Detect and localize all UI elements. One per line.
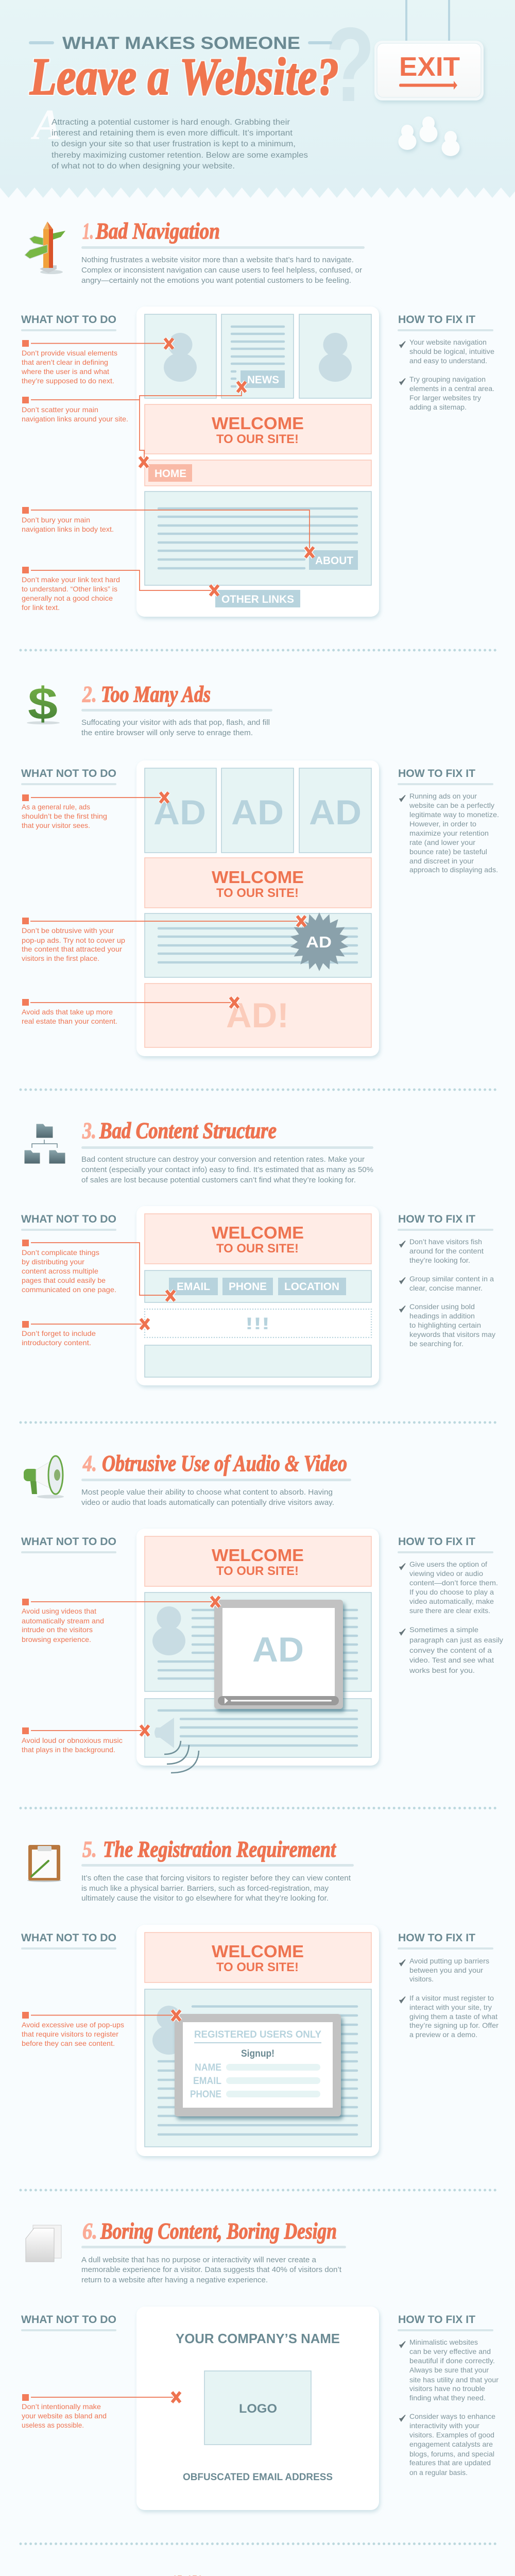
icon: signpost (25, 222, 65, 274)
fix list: Don’t have visitors fish (409, 1238, 482, 1246)
fix list (400, 338, 494, 411)
people icons (399, 116, 459, 156)
callout 1: Don’t provide visual elements (22, 349, 117, 357)
intro text (52, 118, 308, 171)
heading: how to fix it: HOW TO FIX IT (398, 2314, 475, 2326)
registration popup: EMAIL (193, 2076, 221, 2087)
callout 2: that plays in the background. (22, 1745, 115, 1754)
intro text: of what not to do when designing your website. (52, 162, 235, 171)
section 6: boring content (21, 2218, 499, 2510)
description (81, 718, 270, 737)
fix list (400, 1560, 503, 1674)
fix list: website can be a perfectly (409, 801, 494, 809)
video player (214, 1600, 343, 1709)
fix list: Consider using bold (409, 1302, 475, 1311)
panel: mock website: AD! (226, 996, 289, 1035)
section 1: bad navigation (21, 218, 494, 617)
callout 1: As a general rule, ads (22, 803, 90, 811)
fix list: video automatically, make (409, 1597, 494, 1605)
description: Nothing frustrates a website visitor more than a website that’s hard to navigate. (81, 256, 354, 264)
description (81, 256, 362, 285)
fix list: elements in a central area. (409, 384, 494, 393)
fix list: be searching for. (409, 1340, 464, 1348)
callout 1: where the user is and what (21, 367, 109, 376)
callout 1: intrude on the visitors (22, 1625, 93, 1634)
section 7: poor legibility (20, 2572, 497, 2576)
fix list: can be very effective and (409, 2347, 491, 2355)
callout 2: pop-up ads. Try not to cover up (22, 936, 125, 944)
callout 3 (22, 507, 314, 557)
heading: how to fix it (398, 1932, 493, 1950)
callout 1: that your visitor sees. (22, 821, 90, 829)
fix list: Minimalistic websites (409, 2338, 478, 2346)
panel: mock website: AD (153, 793, 206, 832)
callout 4: to understand. “Other links” is (22, 585, 117, 593)
fix list: maximize your retention (409, 829, 489, 837)
fix list: visitors have no trouble (409, 2384, 485, 2393)
callout 1: pages that could easily be (22, 1276, 106, 1284)
icon: clipboard (27, 1845, 61, 1882)
icon: folders (24, 1124, 65, 1164)
description (81, 1488, 334, 1507)
panel: mock website (136, 760, 379, 1056)
callout 2: Don’t scatter your main (22, 405, 98, 414)
title: Leave a Website? (29, 47, 339, 106)
fix list: headings in addition (409, 1312, 475, 1320)
callout 1: Avoid using videos that (22, 1607, 96, 1615)
heading: how to fix it (398, 1536, 493, 1553)
panel: mock website: !!! (245, 1314, 270, 1333)
heading: Boring Content, Boring Design (100, 2218, 337, 2244)
heading: Bad Content Structure (99, 1118, 277, 1143)
description: memorable experience for a visitor. Data suggests that 40% of visitors don’t (81, 2265, 342, 2274)
section 5: registration requirement (21, 1837, 499, 2156)
panel: mock website: AD (309, 793, 362, 832)
fix list: If you do choose to play a (409, 1588, 494, 1596)
header (0, 0, 515, 198)
heading: how to fix it (398, 314, 493, 331)
callout 1: by distributing your (22, 1258, 84, 1266)
callout 2: visitors in the first place. (22, 954, 99, 962)
ad burst: AD (306, 933, 332, 951)
panel: mock website: TO OUR SITE! (216, 432, 299, 446)
registration popup: Signup! (241, 2048, 274, 2059)
fix list: beautiful if done correctly. (409, 2357, 495, 2365)
fix list: paragraph can just as easily (409, 1636, 503, 1644)
panel: mock website: TO OUR SITE! (216, 1960, 299, 1974)
description (81, 1874, 351, 1903)
fix list: and easy to understand. (409, 357, 487, 365)
fix list: blogs, forums, and special (409, 2450, 494, 2458)
description: ultimately cause the visitor to go elsewhere for what they’re looking for. (81, 1894, 329, 1903)
heading: what not to do: WHAT NOT TO DO (21, 1536, 116, 1548)
description: content (especially your contact info) easy to find. It’s estimated that as many as 50% (81, 1165, 373, 1174)
callout 1: that require visitors to register (22, 2030, 118, 2038)
callout 2: Don’t be obtrusive with your (22, 926, 114, 935)
panel: mock website: WELCOME (212, 1942, 304, 1961)
callout 4: Don’t make your link text hard (22, 575, 120, 584)
description (81, 1155, 373, 1184)
callout 2 (22, 382, 246, 467)
heading: what not to do (21, 314, 116, 331)
callout 3: real estate than your content. (22, 1017, 117, 1025)
heading: what not to do (21, 1932, 116, 1950)
panel: mock website: LOCATION (284, 1281, 339, 1293)
callout 1 (22, 792, 168, 829)
panel: mock website (136, 1529, 379, 1773)
fix list: giving them a taste of what (409, 2012, 497, 2021)
callout 3: Don’t bury your main (22, 516, 90, 524)
panel: mock website: TO OUR SITE! (216, 886, 299, 900)
callout 1: Don’t intentionally make (22, 2402, 101, 2411)
fix list: and discreet in your (409, 857, 474, 865)
heading: what not to do: WHAT NOT TO DO (21, 1932, 116, 1944)
fix list: visitors. Examples of good (409, 2431, 494, 2439)
fix list: video. Test and see what (409, 1656, 494, 1664)
callout 2: the content that attracted your (22, 945, 122, 953)
description: the entire browser will only serve to enrage them. (81, 728, 253, 737)
panel: mock website: WELCOME (212, 1223, 304, 1242)
panel: mock website: WELCOME (212, 868, 304, 887)
callout 2 (22, 916, 305, 962)
fix list: However, in order to (409, 820, 476, 828)
callout 2: navigation links around your site. (22, 415, 128, 423)
fix list (400, 2338, 499, 2477)
description: is much like a physical barrier. Barriers, such as forced-registration, may (81, 1884, 329, 1893)
callout 2 (22, 1319, 149, 1347)
fix list: interactivity with your (409, 2421, 479, 2430)
description: of sales are lost because potential customers can’t find what they’re looking for. (81, 1176, 356, 1184)
panel: mock website: YOUR COMPANY’S NAME (176, 2331, 340, 2346)
heading: how to fix it: HOW TO FIX IT (398, 768, 475, 779)
heading: Too Many Ads (101, 682, 211, 707)
registration popup: NAME (195, 2062, 221, 2073)
heading: how to fix it: HOW TO FIX IT (398, 314, 475, 326)
icon: blank pages (26, 2225, 61, 2262)
callout 1: your website as bland and (22, 2412, 107, 2420)
callout 2: Avoid loud or obnoxious music (22, 1736, 123, 1744)
fix list: they’re signing up for. Offer (409, 2021, 499, 2029)
fix list: If a visitor must register to (409, 1994, 494, 2002)
fix list (400, 1238, 495, 1348)
heading: what not to do (21, 1536, 116, 1553)
icon: speaker (154, 1718, 199, 1773)
description: It’s often the case that forcing visitors to register before they can view content (81, 1874, 351, 1883)
fix list: Consider ways to enhance (409, 2412, 495, 2420)
section 2: too many ads (21, 678, 499, 1056)
heading: 6. (82, 2218, 97, 2244)
description: Bad content structure can destroy your conversion and retention rates. Make your (81, 1155, 365, 1164)
description: return to a website after having a negative experience. (81, 2276, 268, 2284)
panel: mock website: WELCOME (212, 414, 304, 433)
description: angry—certainly not the emotions you want potential customers to be feeling. (81, 276, 351, 285)
heading: what not to do (21, 2314, 116, 2331)
fix list: visitors. (409, 1975, 434, 1983)
callout 4: generally not a good choice (22, 594, 113, 602)
callout 1 (21, 338, 173, 385)
icon: dollar sign: $ (28, 678, 58, 729)
heading: The Registration Requirement (103, 1837, 336, 1862)
description: video or audio that loads automatically can potentially drive visitors away. (81, 1498, 334, 1507)
fix list: Group similar content in a (409, 1275, 494, 1283)
fix list: on a regular basis. (409, 2468, 468, 2477)
callout 2: introductory content. (22, 1338, 91, 1347)
heading: how to fix it: HOW TO FIX IT (398, 1932, 475, 1944)
heading: what not to do (21, 768, 116, 785)
fix list: finding what they need. (409, 2394, 486, 2402)
registration popup: PHONE (190, 2089, 221, 2100)
fix list (400, 1957, 499, 2039)
fix list: Try grouping navigation (409, 375, 486, 383)
fix list: clear, concise manner. (409, 1284, 483, 1292)
fix list: Always be sure that your (409, 2366, 489, 2374)
fix list: adding a sitemap. (409, 403, 467, 411)
panel: mock website: LOGO (239, 2402, 277, 2416)
callout 3 (22, 997, 238, 1025)
callout 3: navigation links in body text. (22, 525, 114, 533)
heading: Bad Navigation (95, 218, 220, 244)
description: Most people value their ability to choose what content to absorb. Having (81, 1488, 333, 1497)
panel: mock website: HOME (154, 468, 186, 480)
exit sign (374, 0, 484, 100)
callout 1: Avoid excessive use of pop-ups (22, 2021, 124, 2029)
description: Complex or inconsistent navigation can cause users to feel helpless, confused, or (81, 266, 362, 275)
fix list: features that are updated (409, 2459, 491, 2467)
big question mark: ? (325, 6, 375, 124)
intro text: Attracting a potential customer is hard enough. Grabbing their (52, 118, 290, 127)
intro text: to design your site so that user frustration is kept to a minimum, (52, 140, 296, 148)
callout 1: they’re supposed to do next. (22, 377, 114, 385)
heading: 4. (82, 1451, 97, 1476)
callout 1: browsing experience. (22, 1635, 91, 1643)
callout 1: Don’t complicate things (22, 1248, 99, 1257)
fix list: a preview or a demo. (409, 2030, 477, 2039)
description (81, 2256, 342, 2284)
callout 1: communicated on one page. (22, 1285, 116, 1294)
fix list: between you and your (409, 1966, 483, 1974)
intro text: thereby maximizing customer retention. Below are some examples (52, 151, 308, 160)
fix list: Sometimes a simple (409, 1625, 478, 1634)
heading: 3. (82, 1118, 96, 1143)
fix list: they’re looking for. (409, 1256, 470, 1264)
panel: mock website: ABOUT (315, 555, 353, 567)
heading kicker: WHAT MAKES SOMEONE (62, 33, 300, 53)
fix list: Give users the option of (409, 1560, 487, 1568)
panel: mock website: TO OUR SITE! (216, 1242, 299, 1256)
fix list (400, 792, 499, 874)
panel: mock website: PHONE (229, 1281, 267, 1293)
fix list: convey the content of a (409, 1646, 492, 1654)
panel: mock website (136, 2307, 379, 2510)
icon: megaphone (24, 1456, 64, 1498)
heading: 5. (82, 1837, 97, 1862)
fix list: should be logical, intuitive (409, 347, 494, 355)
exit sign: EXIT (399, 52, 460, 82)
heading: what not to do: WHAT NOT TO DO (21, 1213, 116, 1225)
panel: mock website: EMAIL (177, 1281, 210, 1293)
heading: 2. (82, 682, 97, 707)
heading: how to fix it (398, 768, 493, 785)
heading: what not to do: WHAT NOT TO DO (21, 2314, 116, 2326)
fix list: keywords that visitors may (409, 1330, 495, 1338)
callout 1 (22, 2392, 180, 2429)
callout 3: Avoid ads that take up more (22, 1008, 113, 1016)
fix list: content—don’t force them. (409, 1579, 498, 1587)
callout 1: automatically stream and (22, 1617, 104, 1625)
section 3: bad content structure (21, 1118, 495, 1385)
fix list: around for the content (409, 1247, 484, 1255)
callout 1 (22, 1597, 219, 1643)
heading: how to fix it (398, 2314, 493, 2331)
fix list: For larger websites try (409, 394, 481, 402)
panel: mock website (136, 1925, 379, 2156)
panel: mock website: OTHER LINKS (221, 594, 294, 605)
callout 1: that aren’t clear in defining (22, 358, 108, 366)
callout 2: Don’t forget to include (22, 1329, 96, 1337)
callout 1: useless as possible. (22, 2421, 84, 2429)
heading: how to fix it: HOW TO FIX IT (398, 1213, 475, 1225)
heading: how to fix it: HOW TO FIX IT (398, 1536, 475, 1548)
callout 1: content across multiple (22, 1267, 98, 1275)
panel: mock website: WELCOME (212, 1546, 304, 1565)
fix list: to highlighting certain (409, 1321, 481, 1329)
description: Suffocating your visitor with ads that pop, flash, and fill (81, 718, 270, 727)
ad burst (290, 912, 348, 971)
fix list: legitimate way to monetize. (409, 810, 499, 819)
panel: mock website (136, 1206, 379, 1385)
panel: mock website (136, 307, 379, 617)
fix list: bounce rate) be tasteful (409, 848, 487, 856)
fix list: viewing video or audio (409, 1569, 483, 1578)
callout 2 (22, 1725, 149, 1754)
callout 1 (22, 2010, 180, 2047)
heading: what not to do: WHAT NOT TO DO (21, 768, 116, 779)
callout 1: shouldn’t be the first thing (22, 812, 107, 820)
registration popup (175, 2014, 341, 2116)
heading: what not to do: WHAT NOT TO DO (21, 314, 116, 326)
fix list: Your website navigation (409, 338, 487, 346)
panel: mock website: OBFUSCATED EMAIL ADDRESS (183, 2472, 333, 2483)
panel: mock website: NEWS (247, 374, 279, 386)
video player: AD (252, 1630, 304, 1669)
panel: mock website: TO OUR SITE! (216, 1564, 299, 1578)
fix list: approach to displaying ads. (409, 866, 498, 874)
callout 1: before they can see content. (22, 2039, 115, 2047)
callout 4: for link text. (22, 603, 60, 612)
heading: what not to do (21, 1213, 116, 1231)
heading: 1. (82, 218, 94, 244)
panel: mock website: AD (231, 793, 284, 832)
fix list: works best for you. (409, 1666, 475, 1674)
fix list: sure there are clear exits. (409, 1606, 490, 1615)
drop cap: A (30, 101, 62, 149)
fix list: engagement catalysts are (409, 2440, 493, 2448)
heading: how to fix it (398, 1213, 493, 1231)
callout 4 (22, 567, 218, 612)
fix list: Running ads on your (409, 792, 477, 800)
fix list: Avoid putting up barriers (409, 1957, 489, 1965)
intro text: interest and retaining them is even more difficult. It’s important (52, 129, 293, 138)
section 4: obtrusive audio and video (21, 1451, 503, 1773)
fix list: interact with your site, try (409, 2003, 492, 2011)
fix list: rate (and lower your (409, 838, 475, 846)
registration popup: REGISTERED USERS ONLY (194, 2029, 321, 2040)
fix list: site has utility and that your (409, 2376, 499, 2384)
callout 1 (22, 1240, 175, 1301)
description: A dull website that has no purpose or interactivity will never create a (81, 2256, 317, 2264)
heading: Obtrusive Use of Audio & Video (102, 1451, 347, 1476)
